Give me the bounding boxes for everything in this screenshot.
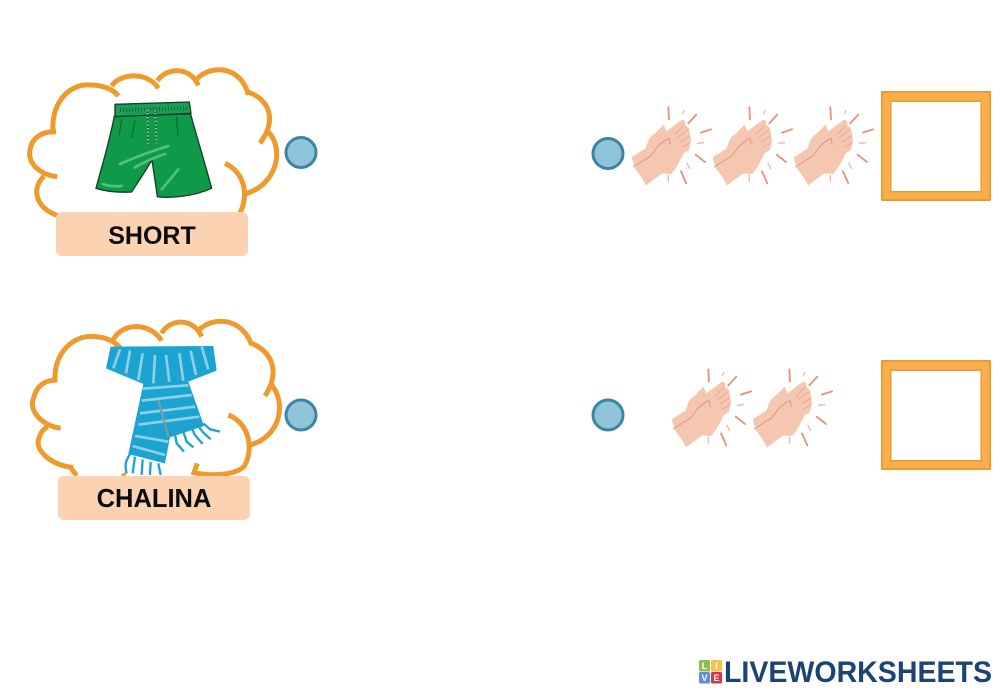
row 2: answer group with two claps	[593, 360, 991, 470]
thought cloud: chalina	[32, 321, 280, 476]
icon: clap 3	[794, 107, 873, 185]
icon: clap 1 row 2	[672, 369, 751, 447]
icon: clap 2	[713, 107, 792, 185]
answer dot: claps left	[593, 138, 623, 168]
label: SHORT: SHORT	[108, 222, 196, 250]
answer box: row 2	[881, 360, 991, 470]
label: SHORT	[56, 212, 248, 256]
icon: clap 1	[632, 107, 711, 185]
answer dot: chalina left	[286, 400, 316, 430]
label: CHALINA: CHALINA	[97, 485, 211, 513]
thought cloud: short	[30, 70, 277, 218]
answer box: row 1	[881, 91, 991, 201]
icon: green shorts	[96, 102, 212, 197]
logo wordmark: LIVEWORKSHEETS	[724, 656, 992, 689]
icon: LIVE blocks	[699, 660, 722, 684]
icon: LIVE blocks: V	[701, 673, 708, 683]
icon: LIVE blocks: I	[715, 661, 718, 671]
row 1: short item	[30, 70, 316, 256]
row 2: chalina item	[32, 321, 316, 520]
answer dot: claps left row 2	[593, 400, 623, 430]
icon: LIVE blocks: E	[713, 673, 720, 683]
logo: LIVEWORKSHEETS	[699, 656, 992, 689]
icon: LIVE blocks: L	[702, 661, 708, 671]
icon: blue scarf	[106, 346, 220, 475]
icon: clap 2 row 2	[753, 369, 832, 447]
answer dot: short left	[286, 138, 316, 168]
label: CHALINA	[58, 476, 250, 520]
row 1: answer group with three claps	[593, 91, 991, 201]
